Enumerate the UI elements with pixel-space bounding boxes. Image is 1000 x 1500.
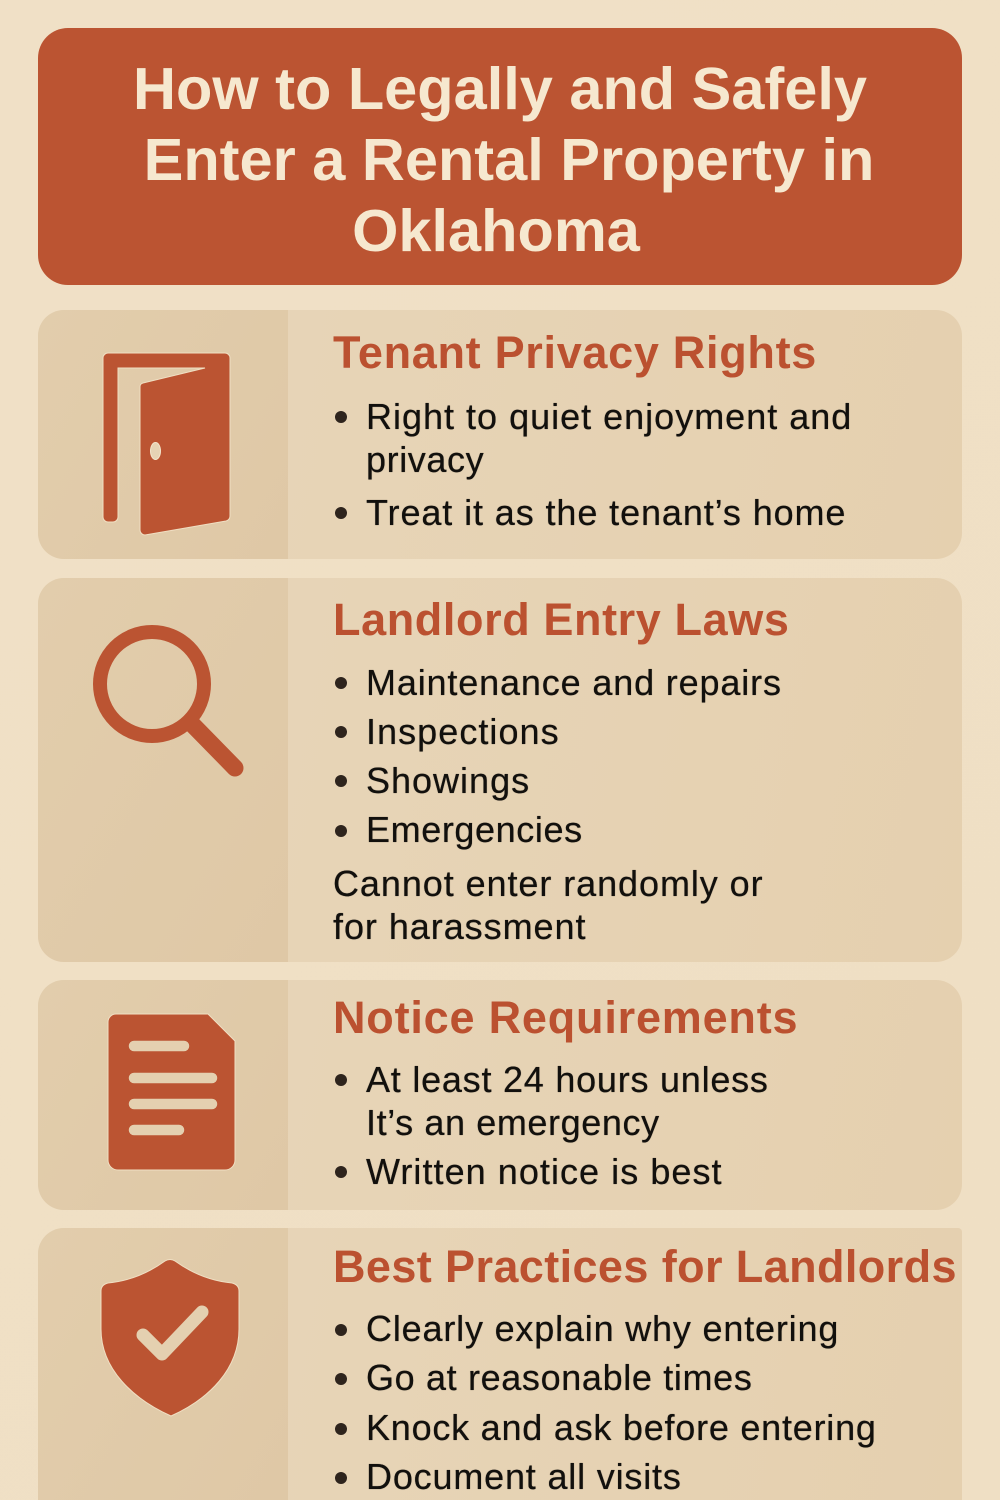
bullets: landlord entry: Inspections	[366, 711, 560, 752]
bullets: best practices: Clearly explain why entering	[366, 1308, 839, 1349]
bullets: tenant privacy: Right to quiet enjoyment and	[366, 396, 852, 437]
heading: best practices: Best Practices for Landlords	[333, 1241, 957, 1292]
heading: landlord entry laws: Landlord Entry Laws	[333, 594, 789, 645]
icon: door	[102, 352, 230, 536]
panel: best practices card background	[38, 1228, 962, 1500]
title: Oklahoma	[352, 197, 640, 264]
bullets: landlord entry: Showings	[366, 760, 530, 801]
bullets: notice: It’s an emergency	[366, 1102, 660, 1143]
title	[133, 55, 874, 264]
panel: tenant privacy card background	[38, 310, 962, 559]
title: How to Legally and Safely	[133, 55, 867, 122]
bullets: landlord entry	[333, 662, 782, 947]
bullets: notice: At least 24 hours unless	[366, 1059, 769, 1100]
bullets: landlord entry: Cannot enter randomly or	[333, 863, 764, 904]
bullets: tenant privacy: privacy	[366, 439, 484, 480]
bullets: landlord entry: for harassment	[333, 906, 586, 947]
icon: document	[108, 1014, 236, 1170]
title banner	[38, 28, 962, 285]
heading: notice requirements: Notice Requirements	[333, 992, 798, 1043]
bullets: best practices: Go at reasonable times	[366, 1357, 752, 1398]
bullets: best practices: Knock and ask before entering	[366, 1407, 877, 1448]
bullets: landlord entry: Maintenance and repairs	[366, 662, 782, 703]
panel: notice card background	[38, 980, 962, 1210]
bullets: best practices: Document all visits	[366, 1456, 682, 1497]
bullets: tenant privacy	[335, 396, 852, 533]
heading: tenant privacy rights: Tenant Privacy Rights	[333, 327, 817, 378]
bullets: landlord entry: Emergencies	[366, 809, 583, 850]
bullets: notice: Written notice is best	[366, 1151, 723, 1192]
title: Enter a Rental Property in	[144, 126, 874, 193]
icon: shield with check	[100, 1259, 240, 1416]
bullets: tenant privacy: Treat it as the tenant’s home	[366, 492, 846, 533]
panel: landlord entry card background	[38, 578, 962, 962]
icon: magnifying glass	[93, 625, 244, 776]
